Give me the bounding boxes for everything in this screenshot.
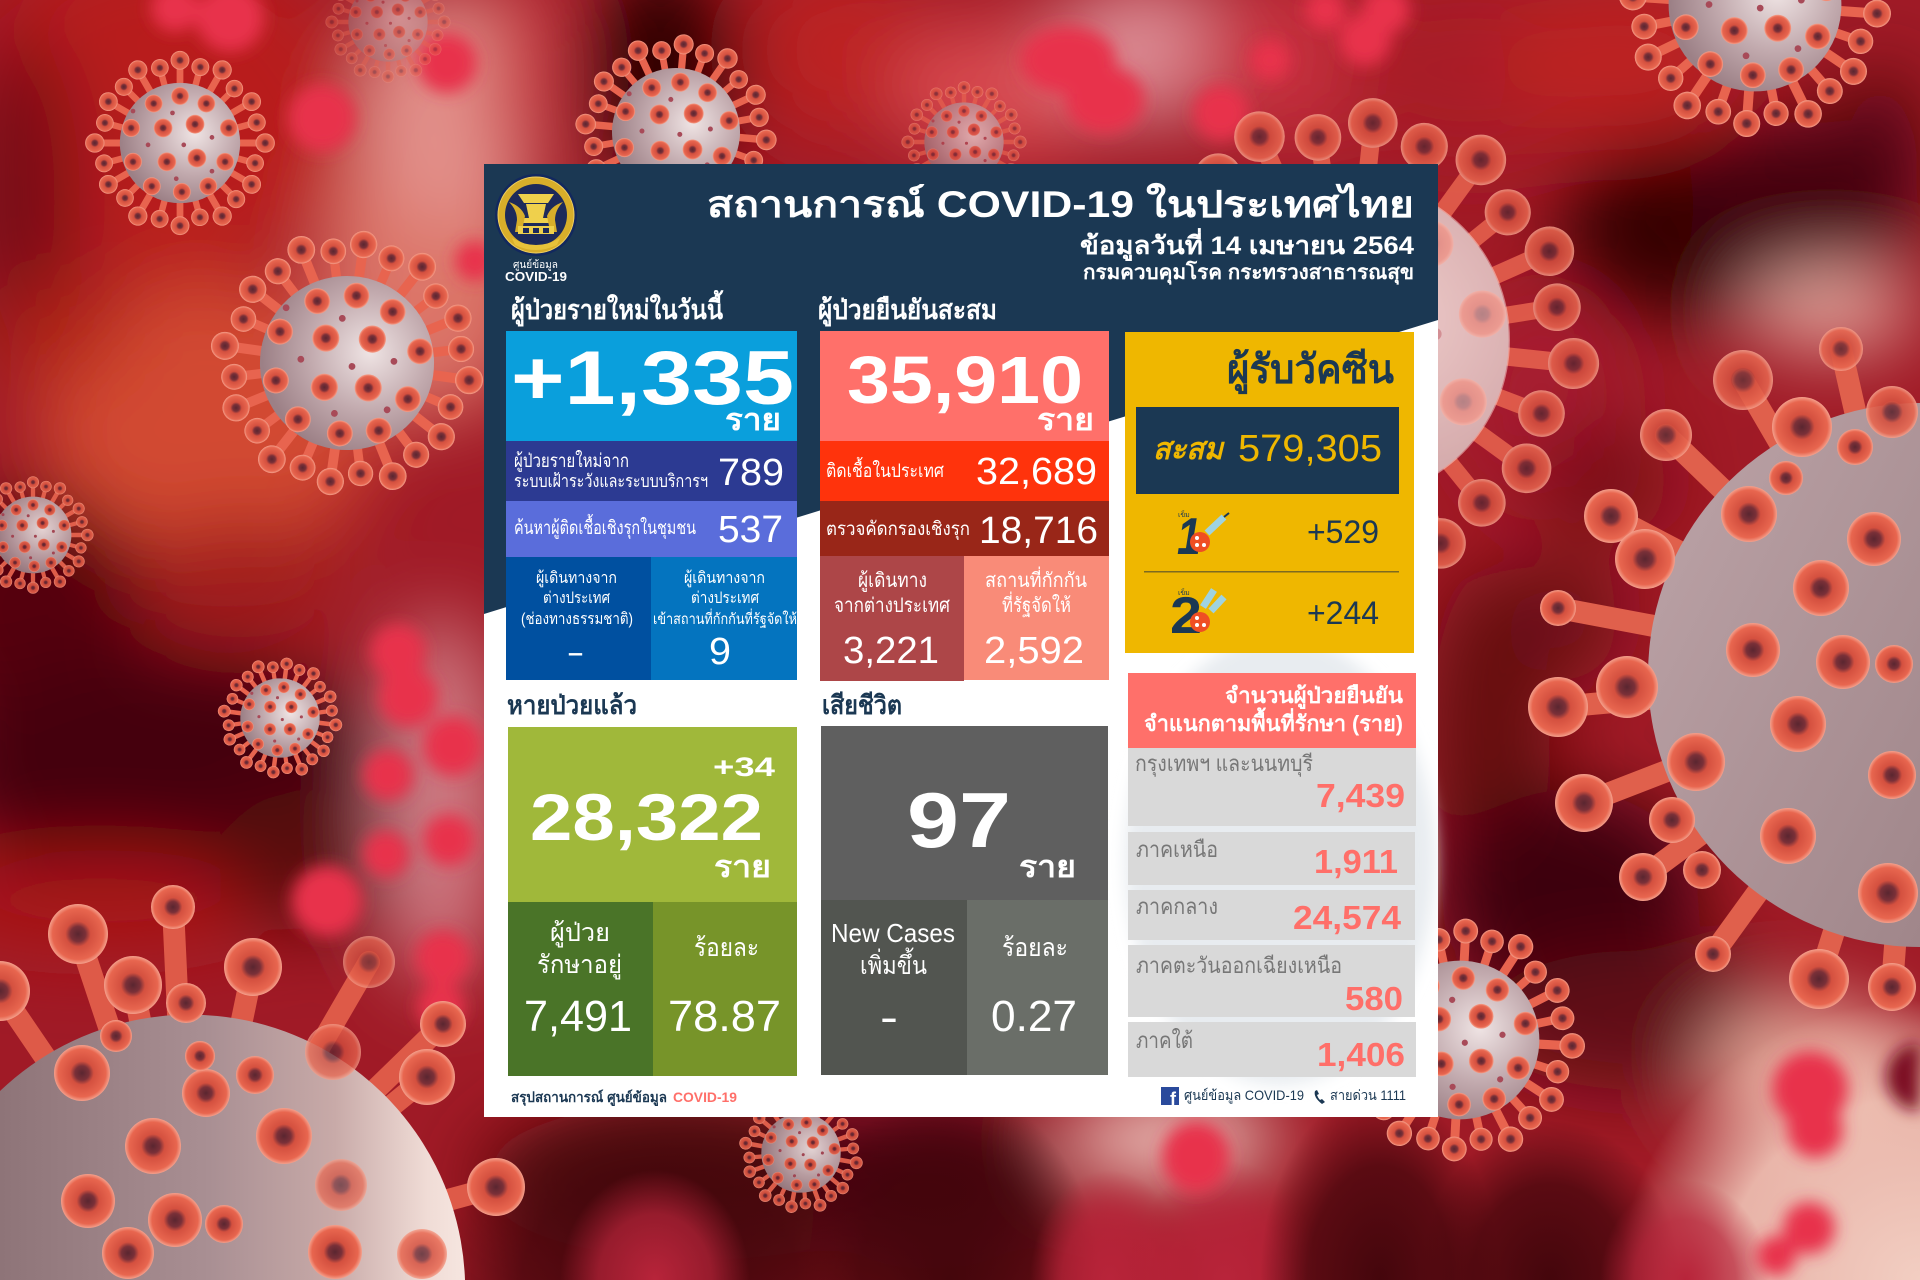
region: North: 1,911	[1314, 843, 1398, 880]
travellers natural channel: ต่างประเทศ	[543, 590, 610, 607]
death percent: ร้อยละ	[1002, 934, 1068, 962]
panel: infographic card	[484, 164, 1438, 1117]
virus: lower centre right	[1329, 912, 1591, 1168]
vaccine heading: ผู้รับวัคซีน	[1227, 348, 1394, 394]
icon: dose 1: เข็ม	[1178, 510, 1190, 519]
recovered total: ราย	[714, 851, 771, 884]
new deaths: เพิ่มขึ้น	[860, 947, 927, 980]
death percent: 0.27	[991, 992, 1077, 1041]
footer: left credit	[511, 1089, 737, 1106]
region header: จำแนกตามพื้นที่รักษา (ราย)	[1144, 707, 1403, 736]
virus: bottom centre	[729, 1082, 873, 1224]
vaccine total: สะสม	[1153, 433, 1225, 466]
vaccine total	[1136, 407, 1399, 494]
region: Central: 24,574	[1293, 899, 1402, 936]
domestic row	[820, 441, 1109, 501]
footer: contact: สายด่วน 1111	[1330, 1087, 1406, 1103]
region: Northeast	[1128, 945, 1415, 1017]
deaths total: ราย	[1019, 851, 1076, 884]
new cases total: +1,335	[511, 336, 794, 421]
footer: contact: ศูนย์ข้อมูล COVID-19	[1184, 1087, 1304, 1104]
travellers cell: 3,221	[843, 630, 939, 672]
panel: cumulative cases	[820, 331, 1109, 681]
in treatment	[508, 902, 653, 1076]
heading: deaths: เสียชีวิต	[822, 690, 902, 720]
recovered total: 28,322	[530, 780, 763, 854]
travellers state quarantine: เข้าสถานที่กักกันที่รัฐจัดให้	[653, 608, 797, 628]
virus: giant bottom left	[0, 885, 525, 1280]
region: Bangkok	[1128, 748, 1416, 826]
heading: recovered: หายป่วยแล้ว	[507, 690, 637, 720]
dose divider	[1144, 571, 1399, 572]
footer: contact	[1161, 1087, 1406, 1109]
virus: faint top centre	[901, 81, 1027, 203]
surveillance row: 789	[718, 452, 784, 494]
date: ข้อมูลวันที่ 14 เมษายน 2564	[1080, 228, 1414, 262]
virus: giant right	[1528, 327, 1920, 1011]
state quarantine cell	[964, 556, 1109, 680]
region: Central: ภาคกลาง	[1136, 894, 1218, 919]
icon: dose 2: 2	[1170, 587, 1202, 645]
cumulative total	[820, 331, 1109, 441]
virus: left lower small	[210, 650, 350, 786]
card white background	[484, 164, 1438, 1117]
panel: vaccine	[1125, 332, 1414, 653]
virus: faint top	[325, 0, 451, 83]
region: South: 1,406	[1317, 1036, 1405, 1073]
region: Bangkok: 7,439	[1316, 777, 1405, 814]
icon: dose 1: 1	[1177, 508, 1201, 566]
footer: left credit: COVID-19	[673, 1089, 737, 1105]
state quarantine cell: ที่รัฐจัดให้	[1002, 591, 1071, 617]
virus: top right	[1610, 0, 1900, 146]
domestic row: 32,689	[976, 451, 1097, 493]
new cases total: ราย	[725, 404, 781, 437]
travellers natural channel: (ช่องทางธรรมชาติ)	[521, 611, 633, 628]
in treatment: ผู้ป่วย	[550, 919, 610, 948]
icon: phone	[1315, 1090, 1325, 1104]
region: Central	[1128, 890, 1415, 940]
region header	[1128, 673, 1416, 748]
dose 2 row	[1170, 587, 1379, 645]
panel: recovered	[508, 727, 797, 1076]
state quarantine cell: 2,592	[984, 630, 1084, 672]
deaths total: 97	[907, 776, 1011, 864]
deaths total	[821, 726, 1108, 900]
region: North: ภาคเหนือ	[1136, 837, 1218, 862]
icon: dose 2	[1170, 587, 1224, 645]
dose 1 count: +529	[1307, 514, 1379, 550]
surveillance row	[506, 441, 797, 501]
virus: top left small	[85, 51, 275, 235]
in treatment: รักษาอยู่	[537, 951, 622, 980]
panel: new cases	[506, 331, 797, 680]
travellers natural channel: ผู้เดินทางจาก	[536, 569, 617, 588]
travellers state quarantine	[651, 557, 797, 680]
recovered total: +34	[713, 752, 775, 782]
cumulative total: 35,910	[847, 343, 1083, 418]
panel: deaths	[821, 726, 1108, 1075]
travellers natural channel	[506, 557, 651, 680]
travellers cell: ผู้เดินทาง	[858, 570, 927, 593]
heading: cumulative: ผู้ป่วยยืนยันสะสม	[818, 295, 997, 327]
surveillance row: ระบบเฝ้าระวังและระบบบริการฯ	[514, 471, 708, 491]
active screening row: ตรวจคัดกรองเชิงรุก	[826, 519, 970, 541]
region header: จำนวนผู้ป่วยยืนยัน	[1225, 683, 1403, 710]
active search row: ค้นหาผู้ติดเชื้อเชิงรุกในชุมชน	[514, 514, 696, 540]
virus: top centre	[567, 26, 785, 238]
cumulative total: ราย	[1037, 404, 1094, 437]
virus: left large	[193, 212, 501, 514]
vaccine total: 579,305	[1238, 428, 1382, 470]
region: Northeast: 580	[1345, 980, 1403, 1017]
recovered percent: 78.87	[668, 992, 781, 1041]
recovered percent: ร้อยละ	[694, 934, 759, 962]
region: Northeast: ภาคตะวันออกเฉียงเหนือ	[1136, 953, 1342, 978]
icon: dose 1	[1177, 508, 1229, 566]
state quarantine cell: สถานที่กักกัน	[985, 566, 1087, 592]
in treatment: 7,491	[524, 992, 632, 1041]
active search row: 537	[718, 509, 783, 551]
centre name covid: COVID-19	[505, 269, 567, 284]
title: สถานการณ์ COVID-19 ในประเทศไทย	[707, 182, 1414, 225]
dose 2 count: +244	[1307, 595, 1379, 631]
active screening row: 18,716	[979, 510, 1098, 552]
new deaths: New Cases	[831, 918, 955, 948]
navy header band	[484, 164, 1438, 614]
new deaths	[821, 900, 967, 1075]
travellers natural channel: –	[568, 640, 583, 667]
travellers cell: จากต่างประเทศ	[834, 595, 950, 617]
header: logo and centre name	[495, 174, 577, 284]
centre name: ศูนย์ข้อมูล	[513, 258, 558, 271]
active screening row	[820, 501, 1109, 556]
recovered percent	[653, 902, 797, 1076]
source: กรมควบคุมโรค กระทรวงสาธารณสุข	[1083, 260, 1414, 285]
icon: facebook: f	[1170, 1089, 1177, 1109]
region: South: ภาคใต้	[1136, 1028, 1193, 1053]
heading: new cases: ผู้ป่วยรายใหม่ในวันนี้	[511, 289, 724, 327]
panel: cases by region	[1128, 673, 1416, 1077]
surveillance row: ผู้ป่วยรายใหม่จาก	[514, 450, 629, 472]
region: Bangkok: กรุงเทพฯ และนนทบุรี	[1135, 751, 1313, 777]
region: South	[1128, 1022, 1416, 1077]
new deaths: -	[880, 993, 898, 1042]
footer: left credit: สรุปสถานการณ์ ศูนย์ข้อมูล	[511, 1089, 667, 1106]
domestic row: ติดเชื้อในประเทศ	[826, 457, 944, 482]
active search row	[506, 501, 797, 557]
travellers cell	[820, 556, 964, 681]
icon: facebook	[1161, 1087, 1179, 1109]
virus: right top pale	[1076, 72, 1624, 608]
region: North	[1128, 832, 1415, 885]
dose 1 row	[1177, 508, 1379, 566]
vaccine background	[1125, 332, 1414, 653]
new cases total	[506, 331, 797, 441]
virus: left edge small	[0, 476, 94, 594]
recovered total	[508, 727, 797, 902]
travellers state quarantine: ต่างประเทศ	[691, 590, 759, 607]
death percent	[967, 900, 1108, 1075]
icon: government seal	[495, 174, 577, 256]
icon: dose 2: เข็ม	[1178, 588, 1190, 597]
travellers state quarantine: 9	[709, 631, 731, 673]
faint ghost shape behind region column	[1125, 635, 1435, 1085]
travellers state quarantine: ผู้เดินทางจาก	[684, 569, 765, 588]
